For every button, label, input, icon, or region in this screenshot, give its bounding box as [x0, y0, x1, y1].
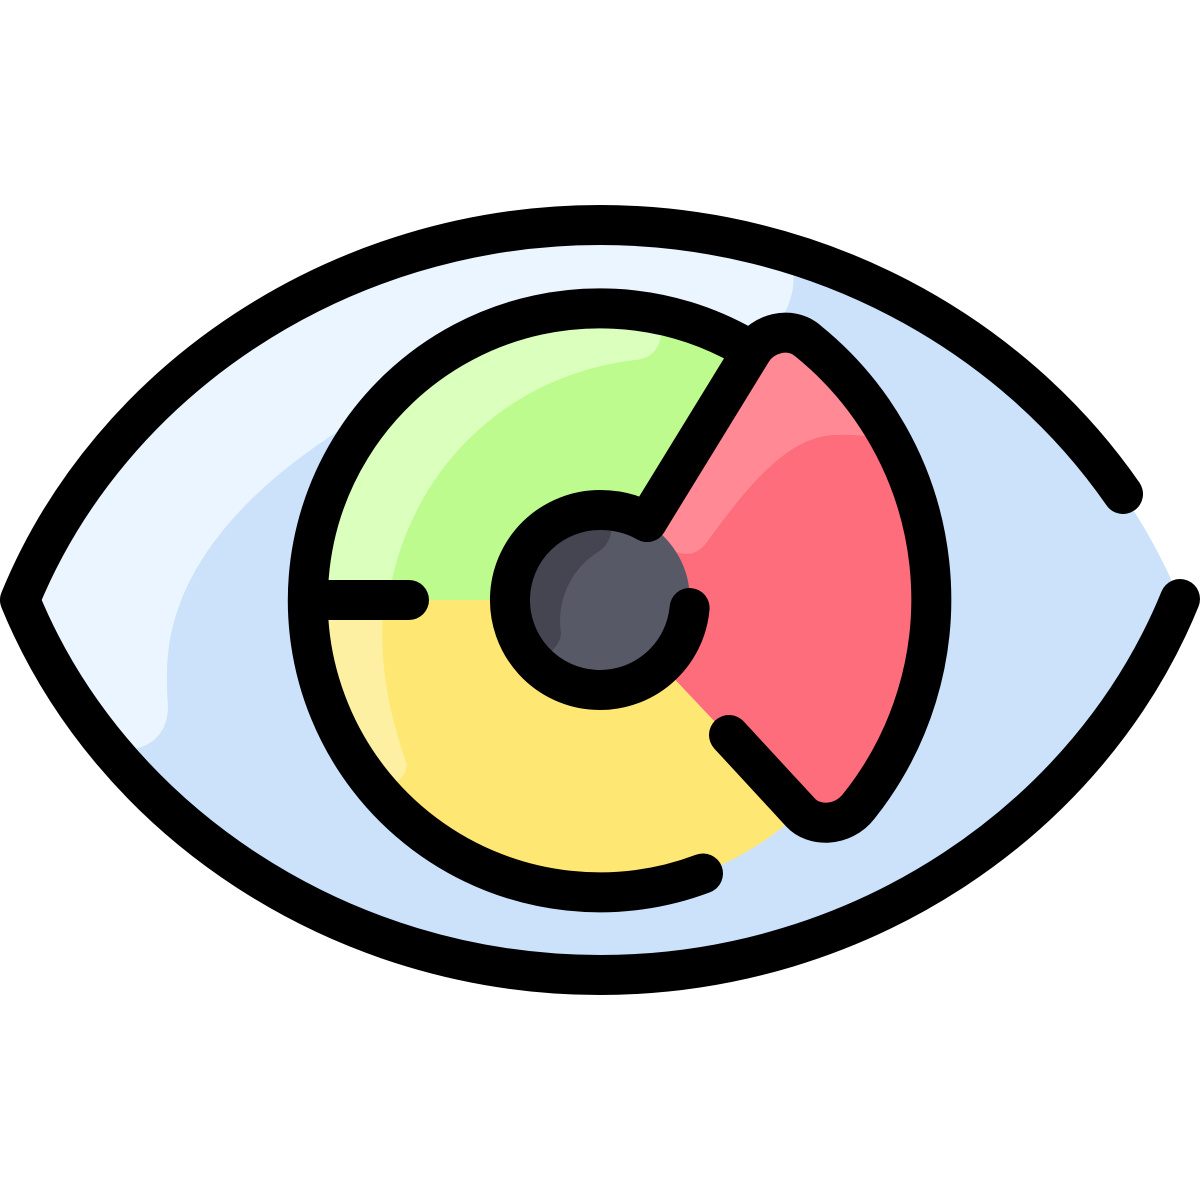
red segment highlight	[655, 333, 872, 554]
iris segment: yellow	[308, 600, 800, 891]
segment divider left	[308, 580, 409, 620]
red segment outline	[647, 333, 931, 823]
pupil	[510, 510, 690, 690]
green segment highlight	[308, 308, 662, 600]
sclera highlight	[20, 225, 794, 778]
iris segment: red	[600, 333, 931, 823]
outlines	[20, 225, 1180, 975]
pupil outline	[510, 510, 690, 690]
iris outline	[308, 308, 745, 892]
sclera: eye white base	[20, 225, 1180, 975]
eye outline	[20, 225, 1180, 975]
iris segment: green	[308, 308, 738, 600]
yellow segment highlight	[308, 600, 407, 782]
